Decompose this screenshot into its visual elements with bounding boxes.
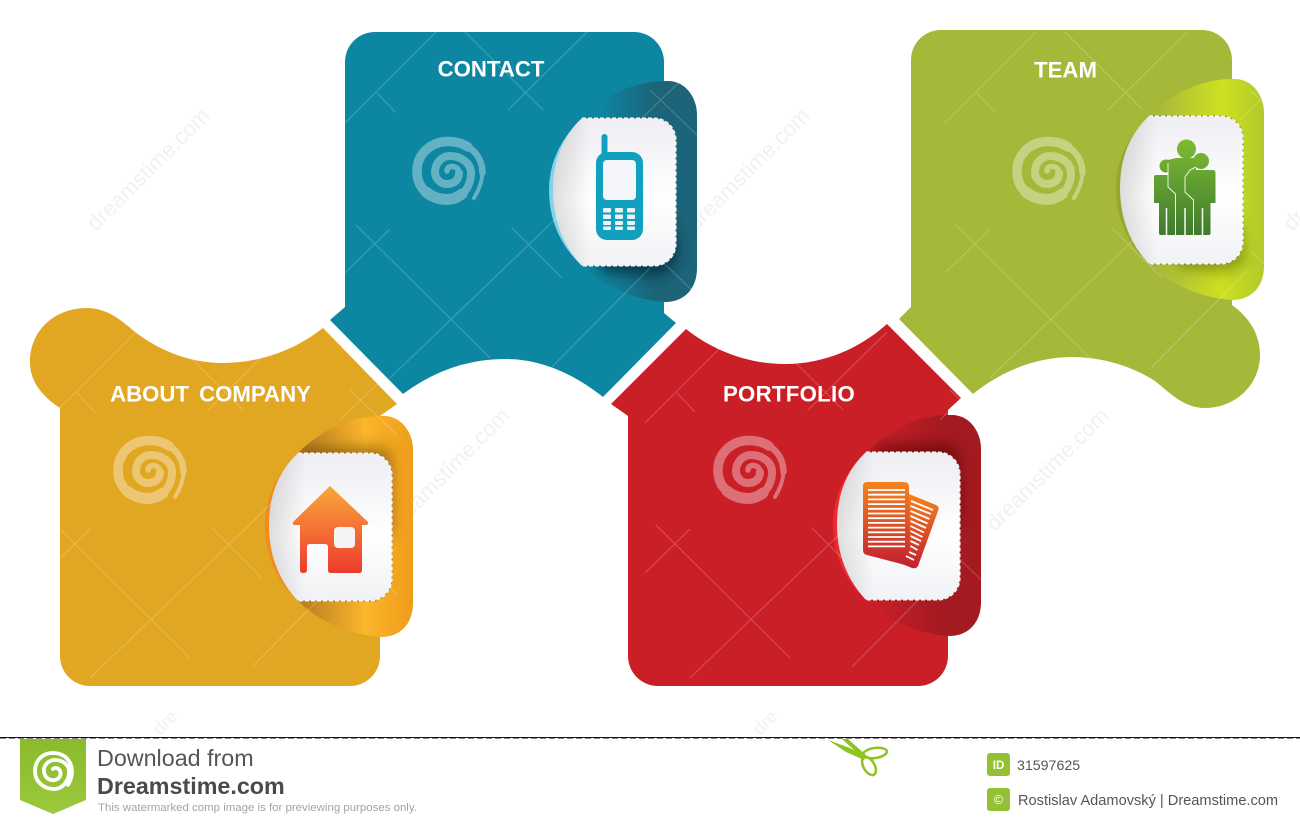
portfolio heading: PORTFOLIO (723, 382, 855, 406)
team watermark lines (945, 32, 1297, 378)
image id row (987, 753, 1080, 776)
team spiral (1017, 142, 1082, 200)
footer watermark marks: dre (149, 706, 181, 739)
tab fold (1149, 79, 1264, 300)
team tab with card (1116, 79, 1264, 300)
footer watermark marks: dre (749, 706, 781, 739)
background watermark text: dreamstime.com (82, 103, 215, 236)
background watermark text: dreamstime.com (682, 103, 815, 236)
icon: scissors (828, 739, 888, 777)
download text block: Download from (97, 745, 254, 771)
icon: documents (863, 482, 939, 568)
background watermark text: dreamstime.com (382, 403, 515, 536)
team heading: TEAM (1034, 58, 1097, 82)
id number: 31597625 (1017, 758, 1080, 774)
crescent edge (549, 118, 582, 266)
about watermark lines (45, 332, 397, 678)
footer watermark marks (149, 706, 781, 739)
crescent edge (265, 453, 298, 601)
crescent edge (833, 452, 866, 600)
paper card (1120, 116, 1243, 264)
background watermark text (82, 103, 1300, 536)
id badge: ID (993, 760, 1004, 772)
contact panel shape (330, 32, 676, 397)
about spiral (118, 440, 184, 498)
background watermark text: dreamstime.com (981, 403, 1114, 536)
contact tab with card (549, 81, 697, 302)
portfolio spiral (718, 440, 784, 498)
footer cut line (0, 737, 1300, 738)
download text block: This watermarked comp image is for previewing purposes only. (98, 802, 417, 814)
icon: house (293, 486, 368, 573)
paper card (553, 118, 676, 266)
contact spiral (417, 142, 482, 200)
contact watermark lines (345, 32, 697, 378)
portfolio panel shape (611, 324, 961, 686)
icon: people (1154, 140, 1216, 235)
tab fold (866, 415, 981, 636)
download text block (97, 745, 417, 814)
portfolio tab with card (833, 415, 981, 636)
download text block: Dreamstime.com (97, 773, 285, 799)
icon: phone (596, 134, 643, 240)
icon: dreamstime ribbon badge (20, 739, 86, 814)
contact heading: CONTACT (438, 56, 545, 82)
panel: contact (330, 32, 697, 397)
paper card (269, 453, 392, 601)
crescent edge (1116, 116, 1149, 264)
panel: team (899, 30, 1297, 408)
panel: portfolio (611, 324, 997, 686)
about heading: ABOUT COMPANY (110, 382, 311, 406)
author name: Rostislav Adamovský | Dreamstime.com (1018, 793, 1278, 809)
panel: about company (30, 308, 413, 686)
copyright badge (987, 788, 1010, 811)
copyright badge: © (994, 792, 1004, 807)
paper card (837, 452, 960, 600)
tab fold (298, 416, 413, 637)
tab fold (582, 81, 697, 302)
about panel shape (30, 308, 397, 686)
about tab with card (265, 416, 413, 637)
team panel shape (899, 30, 1260, 408)
author credit row (987, 788, 1278, 811)
portfolio watermark lines (645, 332, 997, 678)
